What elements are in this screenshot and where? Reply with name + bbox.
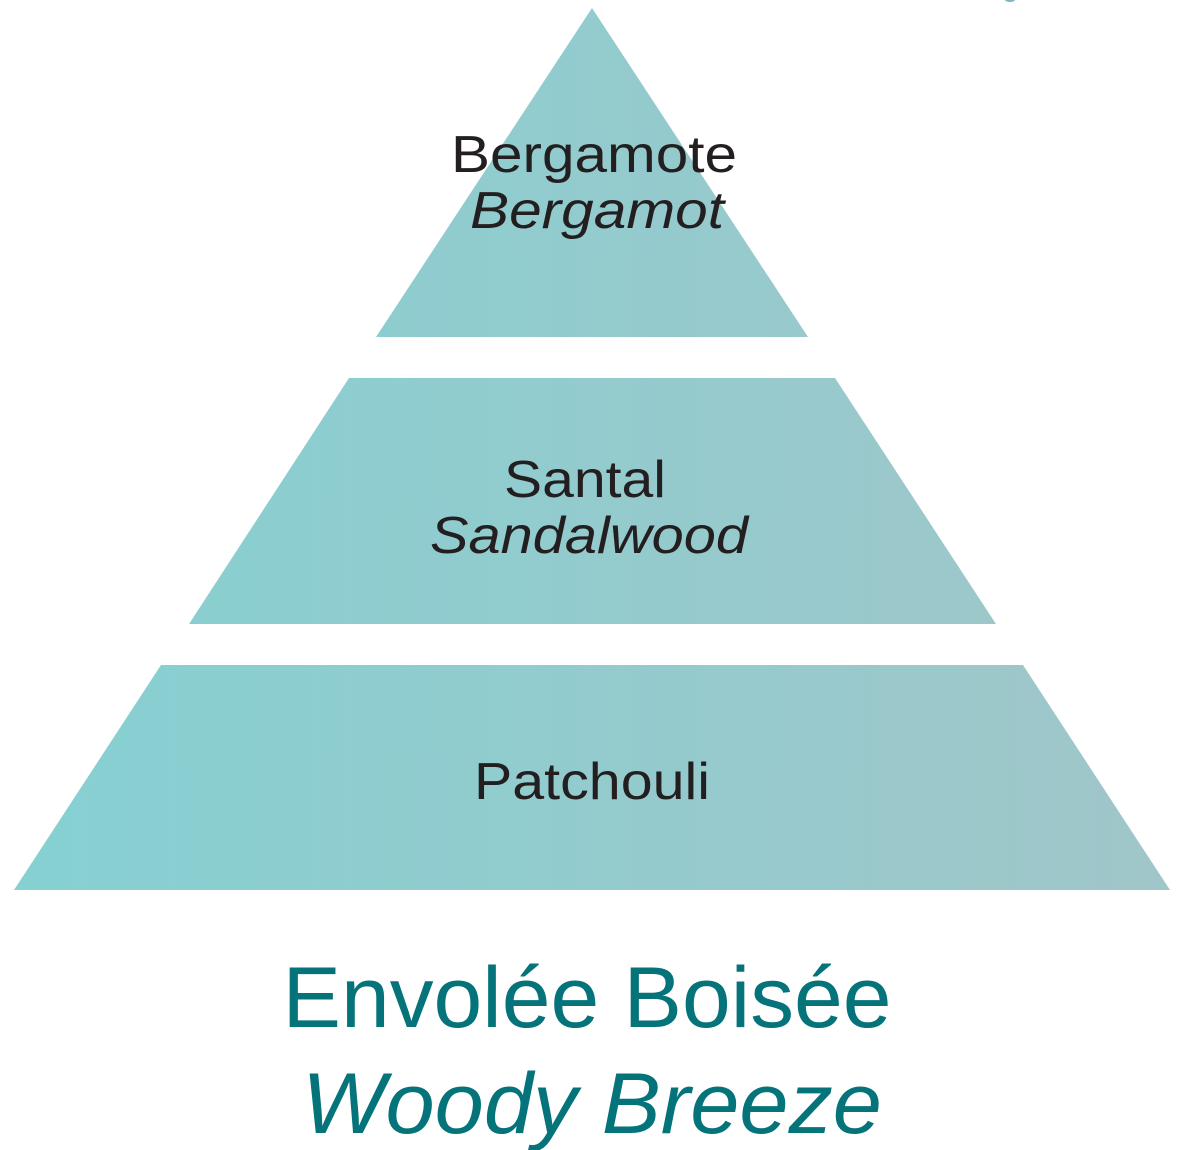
label: Bergamote: Bergamote [451,126,737,184]
label: Sandalwood: Sandalwood [430,507,750,565]
pyramid tier: base note [14,665,1170,890]
pyramid tier: middle note [189,378,996,624]
label: Bergamot: Bergamot [470,182,727,240]
subtitle: Woody Breeze: Woody Breeze [302,1056,882,1150]
pyramid tier: top note [376,8,808,337]
label: Santal: Santal [504,451,666,509]
label: Patchouli: Patchouli [474,753,710,811]
title: Envolée Boisée: Envolée Boisée [282,950,892,1046]
